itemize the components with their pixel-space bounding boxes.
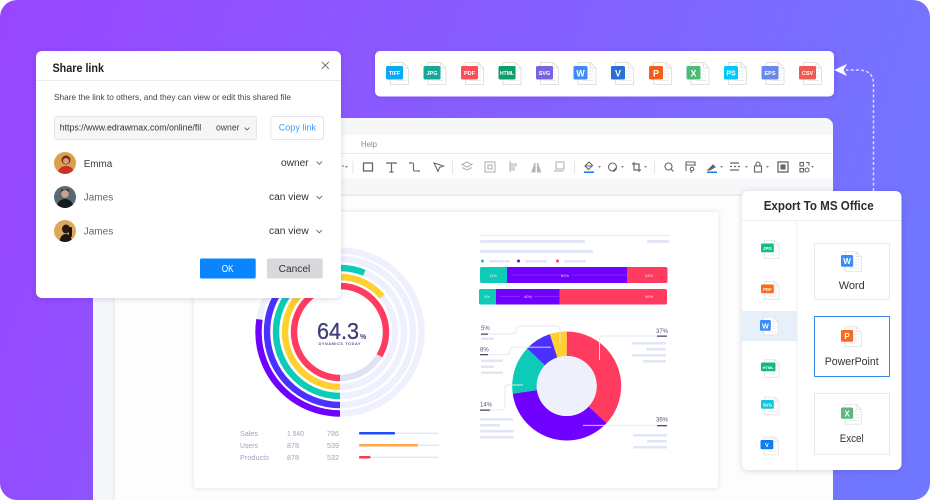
donut leader lines and labels: 14% <box>480 402 493 408</box>
user row: James: can view <box>269 192 309 203</box>
icon: Excel: X <box>690 68 697 78</box>
donut leader lines and labels: 8% <box>480 348 489 354</box>
card: Word <box>814 244 890 300</box>
icon: PDF: PDF <box>464 71 476 77</box>
panel: export to MS Office <box>742 191 902 470</box>
legend table: 532 <box>327 453 339 462</box>
list icon: PDF: PDF <box>763 287 772 292</box>
icon: HTML: HTML <box>500 71 514 77</box>
legend table: Sales <box>240 429 258 438</box>
chart value: 64.3 <box>317 318 359 344</box>
icon: PDF <box>461 62 484 84</box>
stacked bar 1: 14% <box>489 273 497 278</box>
icon: JPG <box>424 62 446 84</box>
user row: James: James <box>84 193 113 204</box>
card: PowerPoint: PowerPoint <box>825 356 879 368</box>
editor window <box>93 118 833 500</box>
icon: TIFF: TIFF <box>389 71 401 77</box>
icon: TIFF <box>386 62 408 84</box>
list icon: JPG <box>761 241 779 258</box>
stacked bar 2: 9% <box>484 294 490 299</box>
link field: https://www.edrawmax.com/online/fil <box>60 122 201 132</box>
icon: SVG: SVG <box>539 71 550 77</box>
document page <box>194 212 718 488</box>
stacked bar 2: 40% <box>524 294 532 299</box>
list icon: PDF <box>761 282 779 299</box>
copy link button <box>271 116 324 140</box>
icon: EPS: EPS <box>764 71 776 77</box>
legend table: Users <box>240 441 258 450</box>
panel: share link dialog <box>36 51 341 298</box>
list icon: Visio: V <box>765 443 769 449</box>
text placeholders and legend above stacked bars <box>480 235 670 262</box>
cancel button <box>267 258 323 278</box>
legend table: 786 <box>327 429 339 438</box>
icon: Word <box>574 62 596 84</box>
user row: James second: James <box>84 227 113 238</box>
legend table: 878 <box>287 453 299 462</box>
user row: James second: can view <box>269 226 309 237</box>
list icon: JPG: JPG <box>763 246 772 251</box>
legend table: 878 <box>287 441 299 450</box>
stacked bar 2 <box>479 289 667 304</box>
card: Word: Word <box>839 280 865 292</box>
icon: CSV: CSV <box>802 71 813 77</box>
legend table: 539 <box>327 441 339 450</box>
link field: owner <box>216 122 240 132</box>
donut leader lines and labels: 36% <box>656 418 669 424</box>
stacked bar 1: 34% <box>645 273 653 278</box>
panel: export format strip <box>375 51 834 96</box>
card: Excel <box>814 394 890 454</box>
link field <box>54 116 256 140</box>
donut leader lines and labels: 37% <box>656 329 669 335</box>
icon: PS <box>724 62 746 84</box>
legend table: Products <box>240 453 269 462</box>
list icon: Visio <box>760 437 778 455</box>
close icon <box>322 62 329 69</box>
user row: James second <box>54 220 322 244</box>
list icon: HTML <box>761 360 779 377</box>
icon: PS: PS <box>726 70 736 78</box>
card: PowerPoint: P <box>844 332 850 341</box>
donut leader lines and labels: 5% <box>481 326 490 332</box>
stacked bar 1 <box>480 267 668 283</box>
toolbar icons <box>342 161 809 174</box>
dialog title: Share link <box>52 61 104 75</box>
card: PowerPoint <box>814 316 890 376</box>
chart value: % <box>360 334 367 341</box>
icon: PowerPoint: P <box>653 68 659 78</box>
icon: HTML <box>498 62 521 84</box>
cancel button: Cancel <box>279 264 310 275</box>
legend table <box>240 429 439 462</box>
donut leader lines and labels <box>480 326 669 448</box>
user row: Emma: Emma <box>84 159 113 170</box>
card: Excel: Excel <box>840 433 864 445</box>
icon: CSV <box>799 62 822 84</box>
chart value: DYNAMICS TODAY <box>318 342 361 346</box>
list icon: SVG: SVG <box>763 402 773 407</box>
arrow: export to format strip <box>834 64 874 191</box>
dialog description: Share the link to others, and they can view or edit this shared file <box>54 92 291 102</box>
OK button <box>200 258 256 278</box>
icon: Excel <box>686 62 709 84</box>
icon: JPG: JPG <box>426 71 438 77</box>
legend table: 1 540 <box>287 429 304 438</box>
card: Word: W <box>843 257 851 266</box>
list icon: HTML: HTML <box>763 365 774 370</box>
user row: James <box>54 186 322 210</box>
copy link button: Copy link <box>279 122 316 132</box>
radial progress chart <box>258 250 422 414</box>
icon: Word: W <box>576 68 585 78</box>
stacked bar 1: 62% <box>561 273 569 278</box>
export panel title: Export To MS Office <box>764 199 874 213</box>
stacked bar 2: 56% <box>645 294 653 299</box>
list icon: SVG <box>761 397 779 415</box>
icon: SVG <box>536 62 558 84</box>
donut chart <box>507 326 626 446</box>
user row: Emma <box>54 152 322 176</box>
OK button: OK <box>222 264 234 275</box>
list icon: Word: W <box>762 321 769 330</box>
icon: Visio <box>611 62 634 84</box>
icon: EPS <box>762 62 784 84</box>
card: Excel: X <box>844 409 850 418</box>
icon: Visio: V <box>615 68 621 78</box>
menu item: Help: Help <box>361 140 378 149</box>
icon: PowerPoint <box>649 62 672 84</box>
list icon: Word <box>760 317 778 335</box>
user row: Emma: owner <box>281 158 309 169</box>
